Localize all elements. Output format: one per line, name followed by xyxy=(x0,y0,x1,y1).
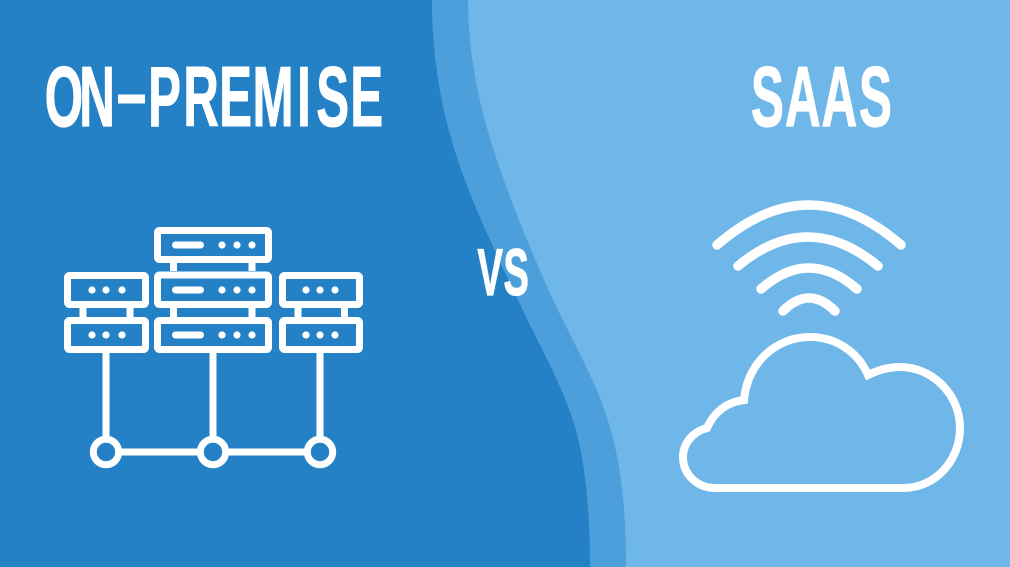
server stack: left xyxy=(68,276,146,350)
icon: cloud xyxy=(683,337,960,488)
server stack: centre xyxy=(158,230,268,350)
server stack: right xyxy=(282,276,360,350)
wave divider band xyxy=(432,0,1010,567)
panel: saas background xyxy=(468,0,1010,567)
heading: on-premise: - xyxy=(128,77,135,118)
heading: vs: VS xyxy=(478,238,529,310)
network lines and nodes xyxy=(93,353,333,465)
heading: saas: SAAS xyxy=(751,49,892,144)
icon: server network xyxy=(68,230,360,465)
heading: on-premise: PREMISE xyxy=(148,49,383,144)
heading: on-premise: ON xyxy=(45,49,115,144)
heading: on-premise xyxy=(45,49,383,144)
icon: wifi signal xyxy=(717,205,901,311)
